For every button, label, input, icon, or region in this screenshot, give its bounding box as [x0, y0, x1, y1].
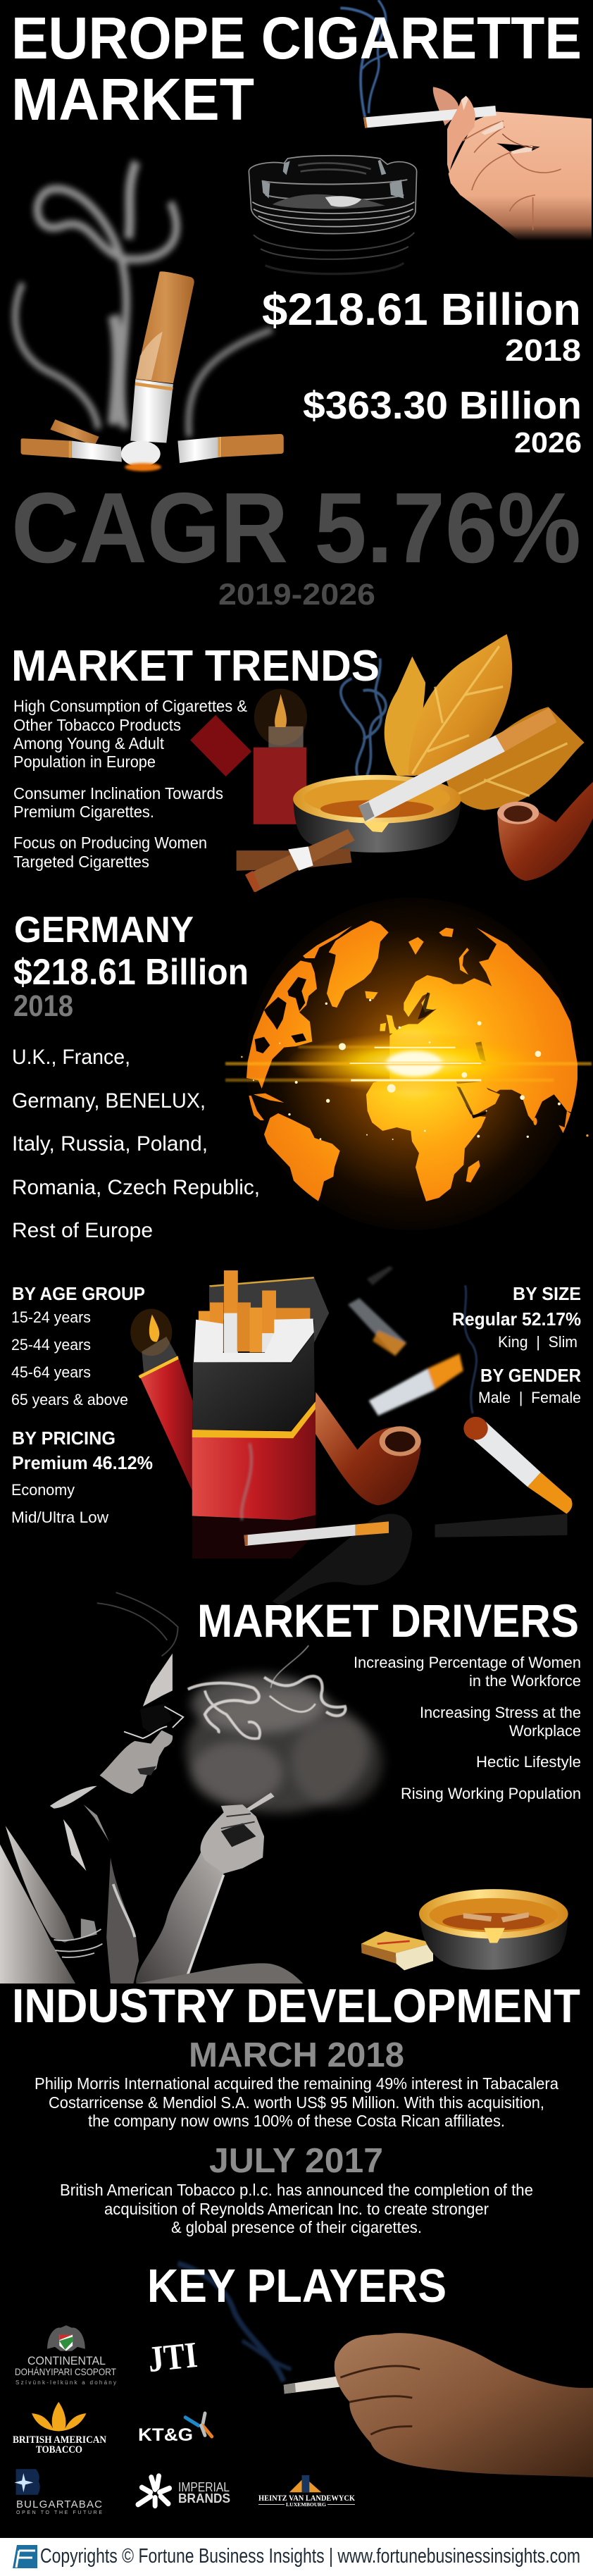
icon: Fortune Business Insights logo — [13, 2545, 37, 2568]
logo: Continental: DOHÁNYIPARI CSOPORT — [15, 2366, 116, 2377]
list of countries: Italy, Russia, Poland, — [12, 1132, 208, 1156]
segment: by size and gender: King | Slim — [498, 1333, 578, 1351]
development: July 2017: & global presence of their cigarettes. — [171, 2218, 422, 2236]
globe ocean glow — [246, 898, 578, 1230]
development: March 2018: Costarricense & Mendiol S.A. worth US$ 95 Million. With this acquisition, — [49, 2093, 544, 2112]
regional heading: Germany: 2018 — [13, 989, 73, 1023]
market trends list: Focus on Producing Women — [13, 834, 207, 852]
icon: red lighter — [190, 688, 307, 824]
market drivers list: Increasing Stress at the — [420, 1704, 581, 1721]
icon: hand holding cigarette — [363, 87, 592, 241]
logo: Heintz van Landewyck: HEINTZ VAN LANDEWYCK — [258, 2493, 356, 2503]
market trends list: Population in Europe — [13, 753, 156, 771]
segment: by age group and pricing: BY AGE GROUP — [12, 1283, 145, 1304]
gold ashtray with butts — [419, 1889, 568, 1970]
key players heading: KEY PLAYERS — [147, 2260, 447, 2312]
icon: cigars — [237, 829, 355, 892]
segment: by size and gender: BY GENDER — [480, 1365, 581, 1386]
market drivers list: Increasing Percentage of Women — [354, 1654, 581, 1671]
market drivers illustration: smoking woman — [0, 1592, 433, 1983]
list of countries: U.K., France, — [12, 1046, 130, 1069]
segment: by age group and pricing: BY PRICING — [12, 1428, 116, 1449]
hero illustration: smoke and stubbed cigarette — [15, 0, 390, 471]
logo: British American Tobacco — [13, 2402, 106, 2456]
icon: cigarette on ashtray — [358, 707, 556, 822]
CAGR: 2019-2026 — [218, 578, 375, 612]
segment: by size and gender — [452, 1283, 581, 1406]
icon: blue smoke — [340, 0, 390, 117]
market drivers list: Rising Working Population — [401, 1785, 581, 1802]
market trends heading: MARKET TRENDS — [11, 642, 380, 691]
icon: cigarette in front of pack — [242, 1443, 389, 1546]
logo: British American Tobacco: TOBACCO — [36, 2444, 82, 2456]
development: July 2017: British American Tobacco p.l.c. has announced the completion of the — [60, 2181, 533, 2199]
development: March 2018: the company now owns 100% of these Costa Rican affiliates. — [88, 2112, 505, 2130]
icon: grey smoke — [15, 162, 273, 437]
logo: Imperial Brands — [138, 2476, 230, 2506]
list of countries: Romania, Czech Republic, — [12, 1176, 260, 1199]
segments illustration: pack, lighter, pipe, cigarettes — [130, 1266, 573, 1606]
icon: gold ashtray — [293, 775, 461, 853]
market drivers list: Workplace — [509, 1722, 581, 1740]
market drivers list — [354, 1654, 581, 1802]
segment: by age group and pricing — [11, 1283, 153, 1526]
market trends list: Among Young & Adult — [13, 734, 165, 753]
globe continents — [246, 921, 578, 1214]
list of countries: Germany, BENELUX, — [12, 1089, 206, 1113]
title: MARKET — [11, 66, 254, 132]
segment: by age group and pricing: 45-64 years — [11, 1363, 91, 1381]
development: July 2017 — [60, 2142, 533, 2236]
logo: Heintz van Landewyck: LUXEMBOURG — [286, 2502, 327, 2508]
hero illustration: hand with cigarette and glass ashtray — [249, 87, 592, 274]
logo: Continental — [15, 2325, 116, 2386]
logo: Bulgartabac — [14, 2469, 102, 2515]
market trends illustration: leaves, lighter, ashtray, cigars, pipe — [190, 634, 593, 892]
segment: by age group and pricing: Economy — [11, 1481, 75, 1499]
development: July 2017: JULY 2017 — [209, 2142, 383, 2180]
market drivers list: Hectic Lifestyle — [476, 1753, 581, 1771]
glowing globe — [225, 898, 592, 1230]
icon: blurred falling cigarettes — [348, 1266, 463, 1416]
segment: by size and gender: Male | Female — [478, 1389, 581, 1406]
market size figures: 2026 — [514, 426, 582, 459]
logo: JTI: JTI — [146, 2335, 199, 2380]
icon: tobacco leaves — [385, 634, 585, 810]
regional heading: Germany: $218.61 Billion — [13, 952, 249, 993]
market size figures: $218.61 Billion — [262, 284, 581, 335]
market size figures: $363.30 Billion — [303, 383, 582, 427]
segment: by age group and pricing: Mid/Ultra Low — [11, 1509, 108, 1526]
globe light flare — [225, 1032, 592, 1094]
icon: blue smoke — [465, 1285, 477, 1413]
logo: Heintz van Landewyck — [258, 2475, 356, 2508]
development: March 2018 — [35, 2036, 558, 2130]
icon: red lighter with flame — [130, 1309, 193, 1490]
icon: smoking pipe — [497, 782, 593, 881]
icon: hair strands and face — [50, 1592, 183, 1809]
segment: by age group and pricing: Premium 46.12% — [12, 1452, 153, 1473]
segment: by size and gender: BY SIZE — [513, 1283, 581, 1304]
globe lakes, bays and seas — [255, 977, 486, 1118]
list of countries — [12, 1046, 260, 1242]
icon: shoulder, chest and arms — [0, 1804, 304, 1983]
logo: Bulgartabac: OPEN TO THE FUTURE — [16, 2510, 102, 2515]
market size figures — [262, 284, 582, 459]
logo: KT&G — [138, 2413, 212, 2445]
icon: stubbed cigarette butts — [21, 271, 284, 471]
icon: exhaled smoke — [186, 1645, 382, 1812]
icon: glass ashtray — [249, 156, 417, 274]
logo: KT&G: KT&G — [138, 2425, 193, 2445]
list of countries: Rest of Europe — [12, 1219, 153, 1242]
market trends list: Premium Cigarettes. — [13, 803, 154, 821]
globe sparkles — [241, 999, 589, 1140]
development: March 2018: MARCH 2018 — [189, 2036, 404, 2074]
icon: blue smoke — [341, 658, 386, 776]
icon: smoking pipe — [315, 1392, 421, 1505]
development: July 2017: acquisition of Reynolds American Inc. to create stronger — [104, 2200, 489, 2218]
logo: Continental: Szívünk-lelkünk a dohány — [15, 2379, 116, 2386]
development: March 2018: Philip Morris International acquired the remaining 49% interest in Tabacalera — [35, 2074, 558, 2093]
logo: Imperial Brands: IMPERIAL — [178, 2480, 230, 2494]
icon: matchbox — [361, 1931, 433, 1970]
segment: by age group and pricing: 65 years & above — [11, 1391, 128, 1408]
market drivers list: in the Workforce — [469, 1672, 581, 1690]
icon: blue smoke — [177, 2263, 291, 2382]
segment: by age group and pricing: 15-24 years — [11, 1308, 91, 1326]
footer — [0, 2538, 593, 2576]
market trends list: High Consumption of Cigarettes & — [13, 697, 247, 715]
key players illustration — [177, 2263, 593, 2477]
icon: cigarette at right — [435, 1417, 573, 1537]
icon: hand holding cigarette — [284, 2333, 593, 2477]
regional heading: Germany — [13, 910, 249, 1023]
market trends list — [13, 697, 247, 871]
icon: cigarette pack — [192, 1270, 329, 1559]
segment: by age group and pricing: 25-44 years — [11, 1336, 91, 1354]
segment: by size and gender: Regular 52.17% — [452, 1308, 581, 1330]
icon: hand with cigarette — [201, 1792, 275, 1874]
pipe reflection — [273, 1513, 412, 1606]
market size figures: 2018 — [505, 333, 581, 368]
logo: British American Tobacco: BRITISH AMERICAN — [13, 2434, 106, 2446]
logo: Continental: CONTINENTAL — [27, 2354, 106, 2367]
logo: Bulgartabac: BULGARTABAC — [16, 2498, 102, 2510]
regional heading: Germany: GERMANY — [14, 910, 194, 950]
market trends list: Consumer Inclination Towards — [13, 784, 223, 803]
market trends list: Other Tobacco Products — [13, 716, 181, 734]
logo: Imperial Brands: BRANDS — [178, 2491, 230, 2506]
market trends list: Targeted Cigarettes — [13, 853, 149, 871]
title — [11, 5, 582, 132]
